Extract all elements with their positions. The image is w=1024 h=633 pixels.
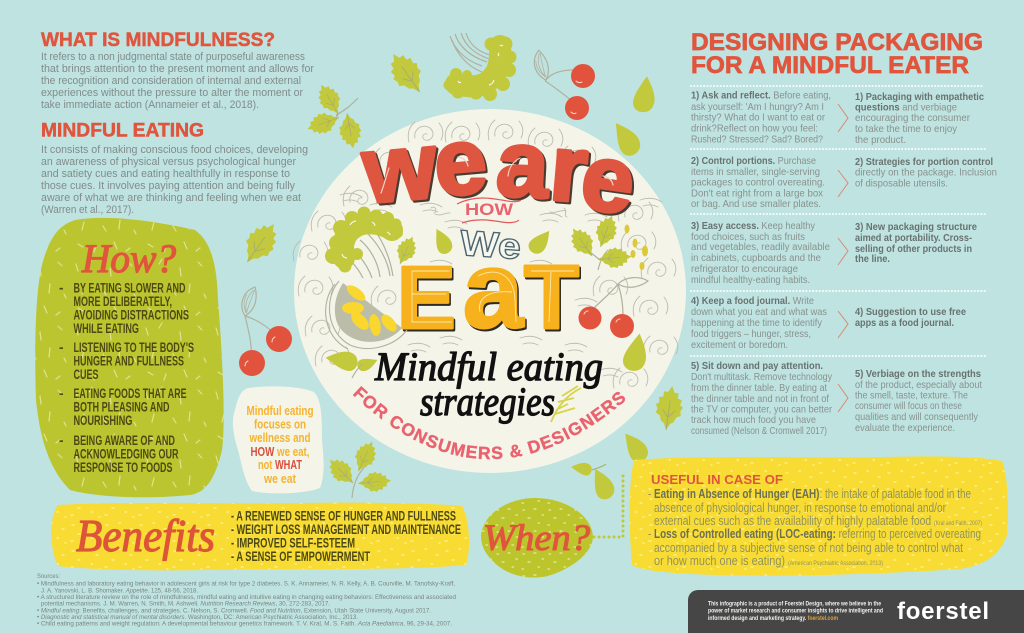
strategy row 5: the TV or computer, you can better (691, 404, 832, 416)
list: how items: BY EATING SLOWER AND (74, 280, 186, 296)
text: mindful eating strategies: Mindful eating (374, 344, 603, 389)
list: how items: HUNGER AND FULLNESS (74, 354, 184, 368)
illustration: cherries left (239, 286, 292, 376)
text block: mindfulness definition: that brings attention to the present moment and allows for (41, 63, 314, 75)
text block: mindful eating definition (41, 144, 308, 216)
text block: mindfulness definition: It refers to a non judgmental state of purposeful awareness (41, 51, 305, 63)
heading: benefits: Benefits (76, 510, 215, 561)
illustration: broccoli top (444, 33, 516, 101)
strategy row 3: food choices, such as fruits (691, 231, 805, 243)
heading: designing packaging: DESIGNING PACKAGING (691, 29, 983, 56)
list: how items: BEING AWARE OF AND (74, 433, 175, 448)
packaging advice 1: questions and verbiage (855, 102, 957, 114)
list: benefits items (231, 508, 461, 564)
heading: useful in case of: USEFUL IN CASE OF (651, 472, 783, 487)
text block: sources (37, 573, 457, 628)
panel: benefits (51, 503, 469, 570)
strategy row 2: items in smaller, single-serving (691, 166, 820, 178)
packaging advice 4 (855, 306, 966, 329)
heading: designing packaging (691, 29, 983, 79)
text block: useful cases: - Loss of Controlled eating (LOC-eating: referring to perceived overeating (648, 527, 981, 541)
strategy row 2: 2) Control portions. Purchase (691, 155, 816, 167)
strategy row 5 (691, 360, 982, 437)
text: footer credit: This infographic is a product of Foerstel Design, where we believe in the (708, 601, 881, 608)
text block: mindful eating definition: and satiety cues and eating healthfully in response to (41, 168, 290, 180)
list: how items: BOTH PLEASING AND (74, 400, 170, 414)
text block: mindful eating definition: aware of what we are thinking and feeling when we eat (41, 192, 301, 204)
illustration: leaf branch bottom (323, 437, 392, 498)
text block: mindful eating definition: It consists of making conscious food choices, developing (41, 144, 308, 156)
arrow (838, 170, 848, 197)
text block: mindful eating definition: (Warren et al., 2017). (41, 204, 134, 216)
list: how items (59, 280, 194, 475)
illustration: leaf cluster top left (304, 80, 364, 150)
packaging advice 1: 1) Packaging with empathetic (855, 91, 984, 103)
packaging advice 1: to take the time to enjoy (855, 123, 958, 135)
text block: mindful eating definition: an awareness of physical versus psychological hunger (41, 156, 296, 168)
decorative swirls (293, 120, 678, 388)
text block: useful cases: absence of physiological hunger, in response to emotional and/or (654, 501, 946, 515)
strategy row 4: 4) Keep a food journal. Write (691, 295, 814, 307)
strategy row 1: 1) Ask and reflect. Before eating, (691, 90, 831, 102)
illustration: seeds (624, 224, 648, 270)
packaging advice 4: apps as a food journal. (855, 317, 954, 329)
list: how items: ACKNOWLEDGING OUR (74, 446, 179, 462)
list: how items: LISTENING TO THE BODY'S (74, 340, 194, 355)
list: how items: CUES (74, 367, 98, 382)
illustration: leaves near when (570, 461, 618, 502)
heading: designing packaging: FOR A MINDFUL EATER (691, 52, 969, 79)
panel: how (35, 218, 224, 497)
packaging advice 3: the line. (855, 253, 890, 265)
callout: mindful eating focus: focuses on (254, 416, 306, 432)
strategy row 5: 5) Sit down and pay attention. (691, 360, 823, 372)
heading: mindful eating: MINDFUL EATING (41, 120, 204, 142)
text: how (457, 198, 521, 223)
connector: when to useful (594, 475, 623, 537)
strategy row 1 (691, 90, 984, 146)
list: how items: - (59, 280, 64, 296)
strategy row 5: consumed (Nelson & Cromwell 2017) (691, 425, 827, 437)
heading: eat: a (464, 231, 526, 352)
packaging advice 5: consumer will focus on these (855, 400, 962, 412)
text block: sources: • Child eating patterns and weight regulation: A developmental behaviour genetics framework. T. V. Kral, M. S. Faith. Acta Paediatrica, 96, 29-34, 2007. (37, 621, 452, 628)
list: how items: - (59, 340, 64, 355)
packaging advice 5: the smell, taste, texture. The (855, 390, 968, 402)
illustration: inner broccoli (325, 206, 403, 278)
text: footer credit (708, 601, 883, 622)
strategy row 3: mindful healthy-eating habits. (691, 274, 810, 286)
list: how items: WHILE EATING (74, 321, 139, 336)
strategy row 5: the dinner table and not in front of (691, 393, 829, 405)
panel: useful in case of (630, 456, 1008, 576)
packaging advice 5: 5) Verbiage on the strengths (855, 368, 981, 380)
logo: foerstel: foerstel (897, 598, 989, 625)
text block: useful cases: - Eating in Absence of Hunger (EAH): the intake of palatable food in the (648, 487, 971, 501)
packaging advice 1 (855, 91, 984, 146)
panel: when (481, 498, 593, 578)
strategy row 2 (691, 155, 997, 210)
callout: mindful eating focus (233, 386, 324, 493)
strategy row 3: in cabinets, cupboards and the (691, 252, 821, 264)
list: benefits items: - A RENEWED SENSE OF HUNGER AND FULLNESS (231, 508, 456, 524)
callout: mindful eating focus: Mindful eating (246, 403, 314, 418)
packaging advice 3 (855, 221, 977, 265)
list: benefits items: - A SENSE OF EMPOWERMENT (231, 548, 370, 564)
text: how: HOW (465, 200, 514, 219)
text block: mindfulness definition: take immediate action (Annameier et al., 2018). (41, 99, 259, 111)
list: benefits items: - IMPROVED SELF-ESTEEM (231, 534, 355, 550)
illustration: leaves top right (607, 75, 658, 159)
text block: mindful eating definition: those cues. It involves paying attention and being fully (41, 180, 295, 192)
list: benefits items: - WEIGHT LOSS MANAGEMENT AND MAINTENANCE (231, 521, 461, 537)
heading: how: How? (81, 236, 176, 281)
list: how items: RESPONSE TO FOODS (74, 460, 172, 475)
illustration: leaf on useful band (618, 428, 652, 465)
arrow (838, 384, 848, 412)
packaging advice 2 (855, 156, 997, 190)
strategy row 3 (691, 220, 977, 286)
packaging advice 5: qualities and will consequently (855, 411, 979, 423)
text block: mindfulness definition (41, 51, 314, 111)
strategy row 1: drink?Reflect on how you feel: (691, 123, 818, 135)
text block: sources: • Mindfulness and laboratory eating behavior in adolescent girls at risk for type 2 diabetes. S. K. Annameier, N. R. Kelly, A. B. Courville, M. Tanofsky-Kraff, (37, 581, 455, 588)
text: for consumers and designers: FOR CONSUMERS & DESIGNERS (352, 386, 626, 460)
strategy row 5: Don't multitask. Remove technology (691, 371, 833, 383)
text block: sources: potential mechanisms. J. M. Warren, N. Smith, M. Ashwell. Nutrition Research Reviews, 30, 272-283, 2017. (41, 601, 330, 608)
text: we: We (459, 222, 522, 267)
strategy row 2: packages to control overeating. (691, 177, 825, 189)
illustration: cherries top (529, 49, 595, 120)
callout: mindful eating focus: wellness and (249, 430, 311, 445)
strategy row 3: 3) Easy access. Keep healthy (691, 220, 816, 232)
illustration: jagged leaf right (653, 384, 686, 432)
text block: sources: • Diagnostic and statistical manual of mental disorders. Washington, DC: American Psychiatric Association, Inc., 2013. (37, 614, 358, 621)
list: how items: NOURISHING (74, 413, 132, 428)
strategy row 4: down what you eat and what was (691, 306, 827, 318)
arrow (838, 311, 848, 338)
heading: when: When? (483, 518, 591, 559)
illustration: dill sprig (551, 386, 581, 422)
text block: mindfulness definition: the recognition and consideration of internal and external (41, 75, 301, 87)
list: how items: - (59, 433, 64, 448)
list: how items: MORE DELIBERATELY, (74, 294, 172, 309)
arrow (838, 238, 848, 265)
heading: eat: E (398, 250, 457, 349)
packaging advice 3: 3) New packaging structure (855, 221, 977, 233)
strategy row 4 (691, 295, 966, 351)
packaging advice 4: 4) Suggestion to use free (855, 306, 966, 318)
strategy row 4: food triggers – hunger, stress, (691, 328, 811, 340)
illustration: jagged leaf top (381, 46, 431, 100)
packaging advice 1: the product. (855, 134, 906, 146)
strategy row 2: Don't eat right from a large box (691, 187, 824, 199)
list: how items: - (59, 386, 64, 401)
heading: eat: T (526, 250, 580, 350)
illustration: leaves left (324, 348, 380, 378)
packaging advice 2: 2) Strategies for portion control (855, 156, 993, 168)
text block: useful cases (648, 487, 982, 568)
text block: useful cases: accompanied by a subjective sense of not being able to control what (654, 541, 963, 555)
strategy row 1: thirsty? What do I want to eat or (691, 112, 825, 124)
packaging advice 5: of the product, especially about (855, 379, 982, 391)
text block: sources: Sources: (37, 573, 60, 580)
packaging advice 5: evaluate the experience. (855, 422, 955, 434)
highlights (381, 157, 613, 193)
callout: mindful eating focus: we eat (263, 471, 297, 486)
heading: eat (397, 229, 580, 352)
text block: sources: • A structured literature review on the role of mindfulness, mindful eating and intuitive eating in changing eating behaviors: Effectiveness and associated (37, 594, 457, 601)
text: mindful eating strategies: strategies (420, 379, 555, 424)
packaging advice 2: of disposable utensils. (855, 178, 948, 190)
packaging advice 3: selling of other products in (855, 243, 972, 255)
strategy row 4: happening at the time to identify (691, 317, 823, 329)
strategy row 1: ask yourself: 'Am I hungry? Am I (691, 101, 824, 113)
strategy row 1: Rushed? Stressed? Sad? Bored? (691, 134, 823, 146)
arrow (838, 104, 848, 132)
heading: eat: E (397, 248, 456, 347)
strategy row 3: refrigerator to encourage (691, 263, 798, 275)
list: how items: AVOIDING DISTRACTIONS (74, 308, 189, 322)
illustration: jagged leaf left (236, 216, 286, 270)
heading: eat: a (463, 229, 524, 350)
illustration: lemon wedge (326, 281, 407, 349)
text block: sources: J. A. Yanovski, L. B. Shomaker. Appetite. 125, 48-56, 2018. (41, 587, 198, 594)
callout: mindful eating focus: HOW we eat, (250, 444, 310, 459)
strategy row 5: from the dinner table. By eating at (691, 382, 827, 394)
text: footer credit: informed design and marketing strategy. foerstel.com (708, 615, 838, 622)
panel: central plate (0, 0, 686, 473)
illustration: inner leaves (391, 212, 632, 270)
illustration: inner cherries (578, 278, 648, 338)
heading: what is mindfulness: WHAT IS MINDFULNESS? (41, 29, 275, 51)
heading: eat: T (524, 248, 579, 348)
text: footer credit: power of market research and consumer insights to drive intelligent and (708, 608, 883, 615)
callout: mindful eating focus: not WHAT (258, 457, 302, 472)
illustration: large leaf right (621, 331, 651, 373)
text block: sources: • Mindful eating: Benefits, challenges, and strategies. C. Nelson, S. Cromwell. Food and Nutrition, Extension, Utah State University, August 2017. (37, 607, 431, 614)
text: mindful eating strategies (374, 344, 603, 424)
list: how items: EATING FOODS THAT ARE (74, 386, 186, 401)
footer bar (688, 590, 1024, 633)
packaging advice 1: encouraging the consumer (855, 112, 970, 124)
strategy row 3: and vegetables, readily available (691, 241, 830, 253)
packaging advice 5 (855, 368, 982, 434)
text block: useful cases: external cues such as the availability of highly palatable food (Kral and Faith, 2007) (654, 514, 982, 528)
packaging advice 2: directly on the package. Inclusion (855, 167, 997, 179)
text block: mindfulness definition: experiences without the pressure to alter the moment or (41, 87, 303, 99)
packaging advice 3: aimed at portability. Cross- (855, 232, 972, 244)
strategy row 4: excitement or boredom. (691, 339, 788, 351)
text block: useful cases: or how much one is eating) (American Psychiatric Association, 2013) (654, 554, 883, 568)
strategy row 2: or bag. And use smaller plates. (691, 198, 821, 210)
strategy row 5: track how much food you have (691, 414, 816, 426)
